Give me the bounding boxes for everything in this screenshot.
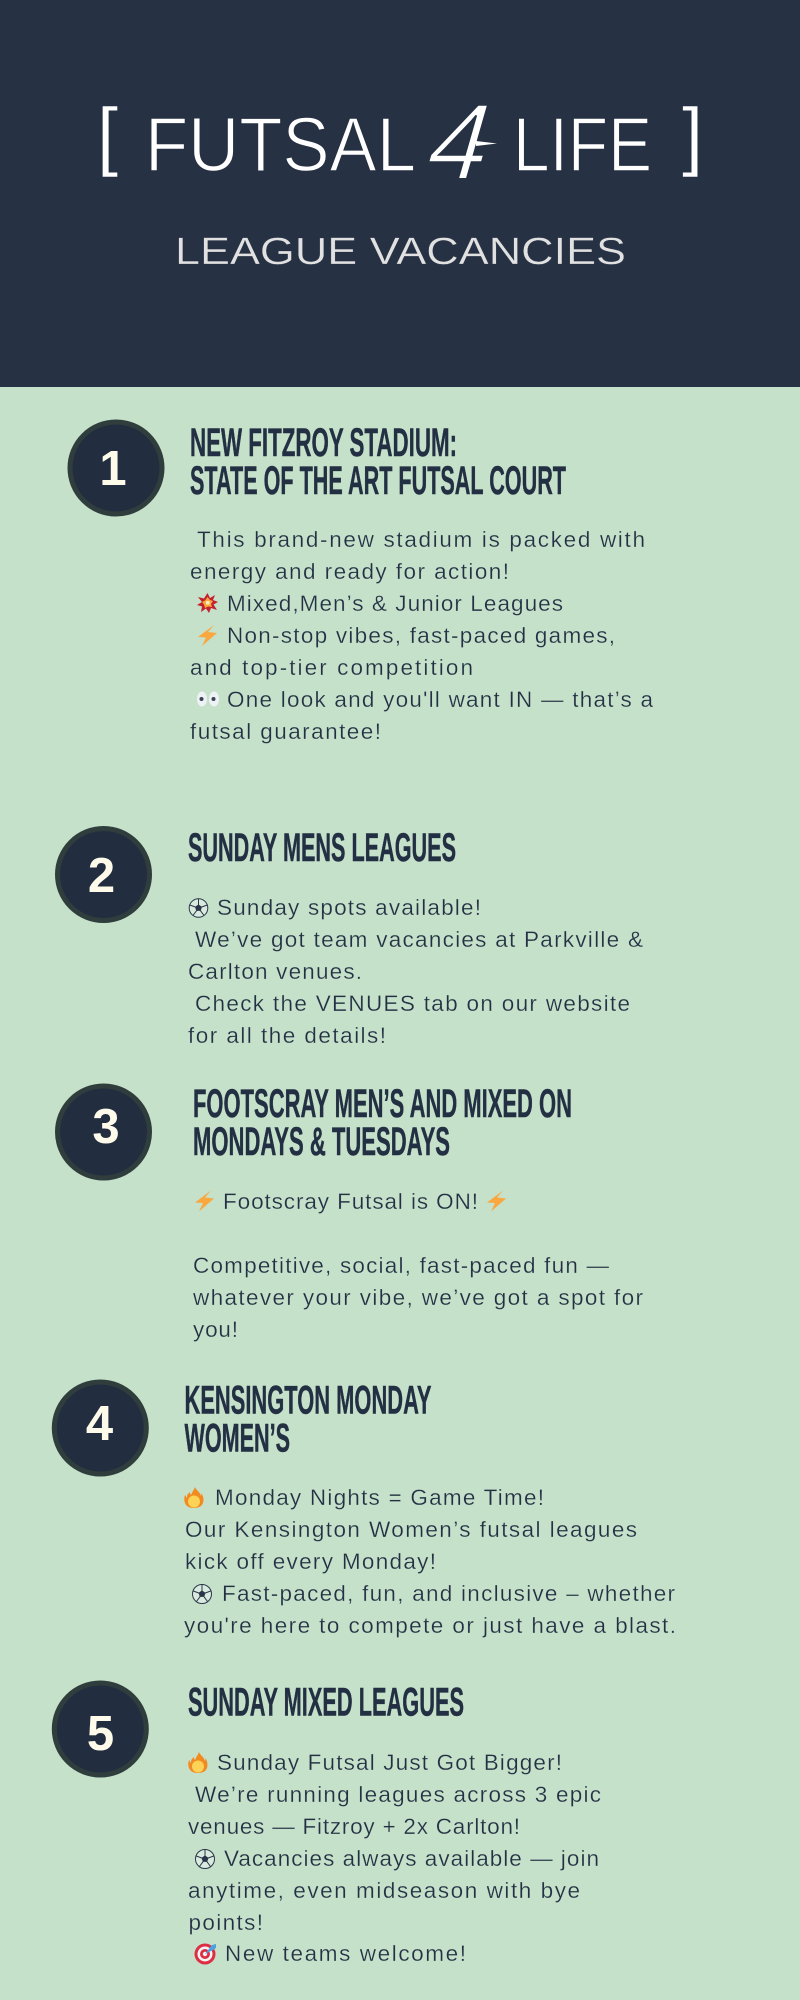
body text 3: whatever your vibe, we’ve got a spot for xyxy=(192,1285,644,1310)
body text 4: Monday Nights = Game Time! xyxy=(215,1485,544,1510)
icon: lightning xyxy=(198,625,217,646)
heading 1: NEW FITZROY STADIUM: xyxy=(190,421,457,465)
body text 3: Competitive, social, fast-paced fun — xyxy=(193,1253,610,1278)
icon: soccer ball xyxy=(189,899,208,917)
body text 5: anytime, even midseason with bye xyxy=(188,1878,580,1903)
number badge 3: 3 xyxy=(92,1100,120,1154)
panel: item 1 New Fitzroy Stadium xyxy=(70,421,653,744)
body text 5: We’re running leagues across 3 epic xyxy=(195,1782,601,1807)
icon: lightning left xyxy=(195,1190,214,1212)
body text 1: energy and ready for action! xyxy=(190,559,509,584)
heading 3 xyxy=(193,1082,572,1164)
heading 3: MONDAYS & TUESDAYS xyxy=(193,1120,450,1164)
body text 5: Vacancies always available — join xyxy=(224,1846,599,1871)
icon: collision xyxy=(197,593,218,613)
body text 4: kick off every Monday! xyxy=(185,1549,436,1574)
body text 2: Check the VENUES tab on our website xyxy=(195,991,630,1016)
body text 1: One look and you'll want IN — that’s a xyxy=(227,687,653,712)
number badge 2: 2 xyxy=(88,849,115,903)
heading 2: SUNDAY MENS LEAGUES xyxy=(188,826,456,870)
body text 4: Fast-paced, fun, and inclusive – whether xyxy=(222,1581,676,1606)
number badge 1 xyxy=(70,422,162,514)
panel: item 5 Sunday Mixed xyxy=(54,1680,601,1966)
body text 2: Carlton venues. xyxy=(188,959,362,984)
number badge 4: 4 xyxy=(86,1397,113,1451)
body text 1: Non-stop vibes, fast-paced games, xyxy=(227,623,615,648)
icon: soccer ball xyxy=(196,1850,214,1868)
heading 4: WOMEN’S xyxy=(184,1416,290,1460)
body text 3: Footscray Futsal is ON! xyxy=(223,1189,478,1214)
number badge 3 xyxy=(58,1086,150,1178)
icon: lightning right xyxy=(487,1190,506,1212)
number badge 5: 5 xyxy=(87,1707,114,1761)
heading 5: SUNDAY MIXED LEAGUES xyxy=(188,1680,464,1724)
icon: target xyxy=(194,1944,216,1964)
body text 4 xyxy=(184,1485,676,1638)
body text 5: venues — Fitzroy + 2x Carlton! xyxy=(188,1814,520,1839)
icon: eyes xyxy=(197,692,219,706)
body text 3 xyxy=(192,1189,644,1342)
heading 1 xyxy=(190,421,566,503)
title: Futsal 4 Life: 4 xyxy=(414,82,508,203)
body text 2: for all the details! xyxy=(188,1023,386,1048)
body text 1 xyxy=(190,527,653,744)
number badge 1: 1 xyxy=(99,442,127,496)
title: Futsal 4 Life xyxy=(97,82,703,203)
icon: soccer ball xyxy=(192,1584,212,1604)
body text 5: New teams welcome! xyxy=(225,1941,466,1966)
body text 1: Mixed,Men’s & Junior Leagues xyxy=(227,591,563,616)
body text 2 xyxy=(188,895,643,1048)
body text 4: Our Kensington Women’s futsal leagues xyxy=(185,1517,637,1542)
body text 3: you! xyxy=(193,1317,238,1342)
panel: header xyxy=(0,0,800,387)
title: Futsal 4 Life: FUTSAL xyxy=(145,102,416,188)
title: Futsal 4 Life: ] xyxy=(682,93,703,178)
number badge 2 xyxy=(58,828,150,920)
body text 1: and top-tier competition xyxy=(190,655,473,680)
body text 1: futsal guarantee! xyxy=(190,719,381,744)
heading 4 xyxy=(184,1378,432,1460)
panel: item 2 Sunday Mens Leagues xyxy=(58,826,643,1048)
body text 4: you're here to compete or just have a blast. xyxy=(184,1613,676,1638)
body text 2: We’ve got team vacancies at Parkville & xyxy=(195,927,643,952)
body text 1: This brand-new stadium is packed with xyxy=(197,527,645,552)
panel: item 4 Kensington xyxy=(54,1378,676,1638)
icon: fire xyxy=(188,1752,207,1773)
heading 4: KENSINGTON MONDAY xyxy=(184,1378,432,1422)
body text 5: points! xyxy=(188,1910,263,1935)
number badge 5 xyxy=(54,1683,146,1775)
body text 2: Sunday spots available! xyxy=(217,895,481,920)
body text 5: Sunday Futsal Just Got Bigger! xyxy=(217,1750,562,1775)
subtitle: League Vacancies: LEAGUE VACANCIES xyxy=(175,231,626,273)
icon: fire xyxy=(184,1487,203,1508)
body text 5 xyxy=(188,1750,601,1966)
panel: item 3 Footscray xyxy=(58,1082,644,1342)
title: Futsal 4 Life: [ xyxy=(97,93,118,178)
number badge 4 xyxy=(54,1382,146,1474)
title: Futsal 4 Life: LIFE xyxy=(513,102,652,188)
